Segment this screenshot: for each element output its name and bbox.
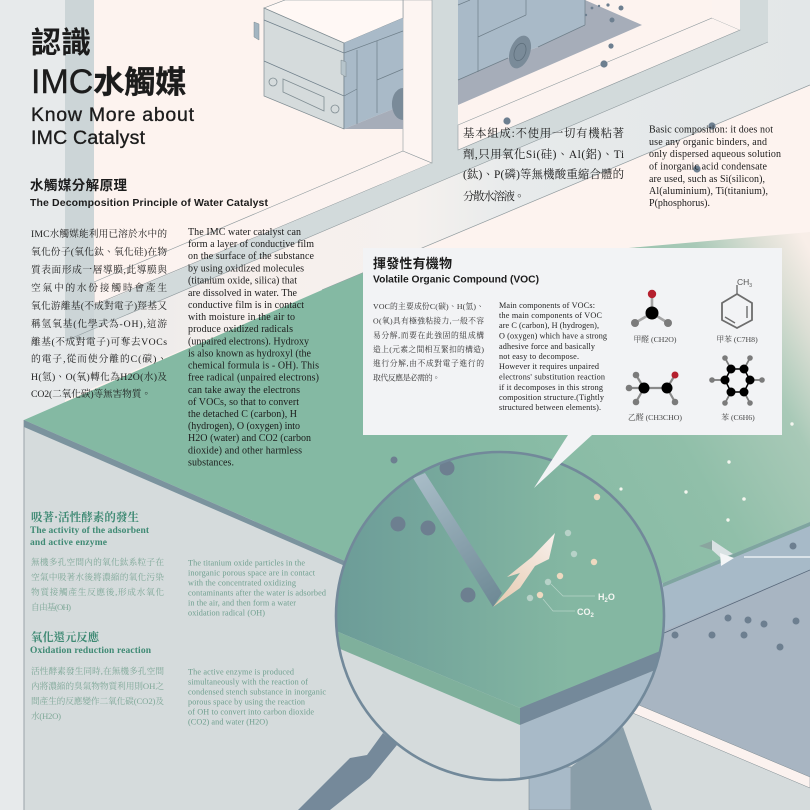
text: VOC English: Main components of VOCs: [499,301,595,310]
reaction products: H2O and CO2 [527,494,615,619]
text block: principle in English: form a layer of conductive film [188,239,314,250]
text block: principle in Chinese: 離基(不成對電子)可奪去VOCs [31,335,167,348]
text block: principle in English: of VOCs, so that to convert [188,397,299,408]
text: adsorbent English: inorganic porous space are in contact [188,568,316,578]
text: VOC Chinese: 造上(元素之間相互緊扣的構造) [373,344,484,354]
text: VOC English: composition structure.(Tightly [499,393,605,402]
reaction products: H2O and CO2: O [608,592,615,602]
text block: principle in English: on the surface of the substance [188,251,315,262]
text block: principle in Chinese: 氧化游離基(不成對電子)羥基又 [31,299,167,312]
heading: decomposition principle: The Decomposition Principle of Water Catalyst [30,197,268,209]
heading: VOC [373,256,539,286]
text block: principle in English: conductive film is in contact [188,300,304,311]
illustration: bus front [254,0,403,129]
text: oxidation English: condensed stench substance in inorganic [188,688,326,696]
title: IMC Catalyst [31,127,146,149]
text: adsorbent Chinese: 空氣中吸著水後將濃縮的氧化污染 [31,571,164,582]
text: VOC English: are C (carbon), H (hydrogen), [499,321,599,330]
reaction products: H2O and CO2: CO [577,607,590,617]
text block: principle in English: (unpaired electrons). Hydroxy [188,336,309,348]
heading: oxidation reduction [30,630,152,656]
text: adsorbent Chinese: 無機多孔空間內的氧化鈦系粒子在 [31,556,164,567]
arrow: airflow to the right [699,540,810,566]
text block: principle in Chinese [31,227,168,400]
needle: pore channel [413,473,502,607]
text: adsorbent English: oxidation radical (OH) [188,608,265,618]
text block: principle in English: by using oxidized molecules [188,264,304,274]
text: oxidation Chinese [31,665,164,721]
text block: principle in Chinese: H(氫)、O(氧)轉化為H2O(水)及 [31,370,167,383]
heading: adsorbent: The activity of the adsorbent [30,526,150,536]
text: VOC English: O (oxygen) which have a strong [499,332,607,340]
heading: decomposition principle: 水觸媒分解原理 [30,177,128,193]
heading: VOC: Volatile Organic Compound (VOC) [373,274,539,286]
text: VOC Chinese: O(氧)具有極強粘接力,一般不容 [373,316,484,326]
text block: principle in English: are dissolved in water. The [188,288,298,299]
text block: principle in English: with moisture in the air to [188,312,295,323]
section: adsorbent and active enzyme [30,510,326,618]
text: VOC English: the main components of VOC [499,311,603,320]
text: VOC Chinese: 易分解,而要在此強固的組成構 [373,330,484,340]
text block: principle in Chinese: 氧化份子(氧化鈦、氧化硅)在物 [31,245,167,258]
magnifier handle [298,733,397,810]
text block: basic composition in English [649,124,781,209]
text: VOC Chinese [373,301,484,382]
text block: basic composition in English: Al(aluminium), Ti(titanium), [649,186,768,197]
text: oxidation Chinese: 間產生的反應變作二氧化碳(CO2)及 [31,695,164,706]
text: oxidation Chinese: 內將濃縮的臭氣物物質利用則OH之 [31,680,164,691]
text: oxidation English: simultaneously with the reaction of [188,678,308,686]
text block: basic composition in English: only dispersed aqueous solution [649,149,781,160]
text block: principle in English: substances. [188,458,234,468]
molecule: formaldehyde [631,290,677,344]
text block: principle in Chinese: CO2(二氧化碳)等無害物質。 [31,387,151,400]
text: oxidation English: of OH to convert into carbon dioxide [188,708,314,716]
molecule: acetaldehyde: 乙醛 (CH3CHO) [628,412,682,422]
bolt: oxidation reaction arrow [493,533,555,607]
molecule: benzene [709,355,765,422]
text block: principle in English [188,227,319,468]
text block: basic composition in Chinese: (鈦)、P(磷)等無機酸重縮合體的 [463,167,624,181]
text: adsorbent English: with the concentrated oxidizing [188,578,296,588]
heading: oxidation reduction: Oxidation reduction reaction [30,646,152,656]
reaction products: H2O and CO2: 2 [604,598,608,604]
text block: basic composition in Chinese [463,126,624,203]
text: VOC English [499,301,607,412]
molecule: toluene: 甲苯 (C7H8) [716,334,758,344]
text: VOC English: not easy to decompose. [499,352,579,361]
text: oxidation Chinese: 水(H2O) [31,710,61,721]
green catalyst plate [24,232,810,640]
text: adsorbent Chinese: 物質接觸產生反應後,形成水氧化 [31,586,164,597]
text block: basic composition in English: Basic composition: it does not [649,124,773,136]
text block: principle in Chinese: 稱氫氧基(化學式為-OH),這游 [31,317,167,330]
text: adsorbent Chinese: 自由基(OH) [31,601,71,612]
text: VOC English: However it requires unpaired [499,362,599,371]
title: IMC水觸媒 [31,63,186,101]
reaction products: H2O and CO2: H [598,592,604,602]
text block: principle in English: dioxide) and other harmless [188,446,302,456]
heading: VOC: 揮發性有機物 [373,256,452,271]
text block: basic composition in Chinese: 基本組成:不使用一切有機粘著 [463,126,624,140]
text: adsorbent English: in the air, and then form a water [188,598,296,608]
text: VOC English: adhesive force and basically [499,342,596,351]
text block: basic composition in Chinese: 劑,只用氧化Si(硅)、Al(鋁)、Ti [463,147,624,161]
base: lower wall and blue wall [24,420,810,810]
text block: basic composition in English: are used, such as Si(silicon), [649,174,765,185]
text: VOC English: if it decomposes in this strong [499,383,603,392]
text block: principle in English: the detached C (carbon), H [188,409,297,420]
particles: on plate and blue wall [390,422,800,650]
reaction products: H2O and CO2: 2 [590,613,594,619]
text block: principle in Chinese: 空氣中的水份接觸時會產生 [31,281,167,294]
text block: principle in English: free radical (unpaired electrons) [188,372,319,384]
molecule: acetaldehyde [626,372,682,422]
text: VOC English: electrons' substitution reaction [499,372,605,382]
text: oxidation English: porous space by using the reaction [188,698,305,706]
text block: principle in English: The IMC water catalyst can [188,227,301,238]
text: oxidation English [188,668,326,726]
text: oxidation English: The active enzyme is produced [188,668,294,676]
text: oxidation English: (CO2) and water (H2O) [188,718,268,726]
text block: principle in English: (hydrogen), O (oxygen) into [188,421,300,432]
text: adsorbent Chinese [31,556,164,612]
magnifier: enlarged plate view [334,450,666,782]
text block: principle in English: produce oxidized radicals [188,324,293,335]
heading: decomposition principle [30,177,268,209]
text block: basic composition in English: use any organic binders, and [649,137,767,148]
text block: principle in English: (titanium oxide, silica) that [188,276,297,286]
heading: oxidation reduction: 氧化還元反應 [31,630,100,644]
particles: top area [503,3,716,173]
title: Know More about [31,104,195,126]
molecule: toluene [716,277,758,344]
table legs under magnifier [529,727,652,810]
text: VOC Chinese: 進行分解,由不成對電子進行的 [373,358,484,368]
text block: principle in Chinese: IMC水觸媒能利用已溶於水中的 [31,227,167,240]
molecule: formaldehyde: 甲醛 (CH2O) [633,334,677,344]
heading: adsorbent: and active enzyme [30,538,107,548]
heading: adsorbent: 吸著·活性酵素的發生 [31,510,140,524]
text block: principle in Chinese: 質表面形成一層導膜,此導膜與 [31,263,168,276]
molecule: benzene: 苯 (C6H6) [721,412,755,422]
text: adsorbent English: contaminants after the water is adsorbed [188,588,326,598]
molecule: toluene: CH [737,277,749,287]
text block: basic composition in Chinese: 分散水溶液。 [463,189,525,203]
section: oxidation reduction reaction [30,630,326,726]
dark pollutant dots [390,516,476,602]
text: VOC English: structured between elements). [499,403,601,412]
text block: basic composition in English: of inorganic acid condensate [649,162,768,172]
illustration: bus side and shadow [458,0,642,105]
text: VOC Chinese: 取代反應是必需的。 [373,372,440,382]
text: VOC Chinese: VOC的主要成份C(碳)、H(氫)、 [373,301,484,311]
title: 認識 [31,27,91,60]
text: adsorbent English: The titanium oxide particles in the [188,558,305,568]
molecule: toluene: 3 [749,283,752,289]
text block: principle in English: chemical formula is - OH). This [188,360,319,372]
title [31,27,195,149]
text block: principle in English: is also known as hydroxyl (the [188,348,312,360]
text block: principle in English: H2O (water) and CO2 (carbon [188,433,311,444]
text: adsorbent English [188,558,326,618]
text block: basic composition in English: P(phosphorus). [649,198,710,209]
panel: volatile organic compound callout [363,248,782,488]
text block: principle in Chinese: 的電子,從而使分離的C(碳)、 [31,352,167,365]
heading: adsorbent [30,510,150,548]
text block: principle in English: can take away the electrons [188,385,300,396]
text: oxidation Chinese: 活性酵素發生同時,在無機多孔空間 [31,665,164,676]
